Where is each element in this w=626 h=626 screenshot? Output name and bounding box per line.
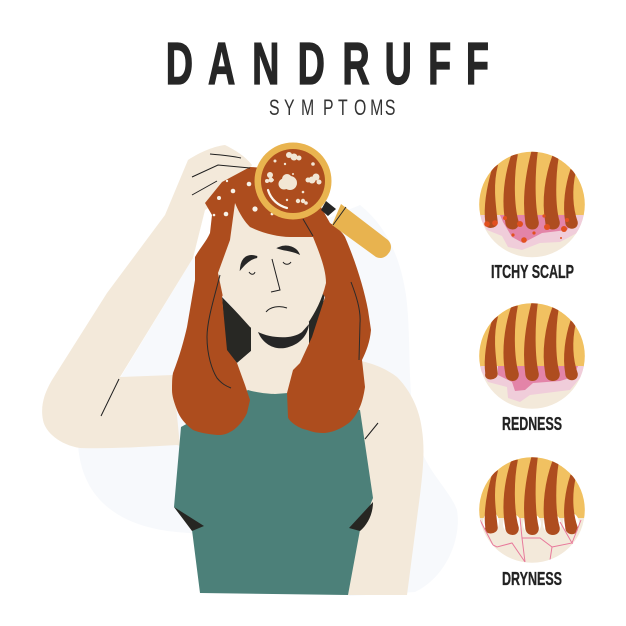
flakes on hair [213, 180, 273, 216]
panel: redness [478, 303, 586, 434]
right arm [340, 360, 423, 595]
neck [237, 322, 309, 400]
label: DRYNESS [502, 569, 562, 589]
subtitle: SYMPTOMS [269, 97, 395, 121]
flakes [265, 152, 322, 205]
handle [321, 201, 336, 216]
background blob [78, 205, 458, 596]
raised arm [42, 145, 252, 448]
title: DANDRUFF [166, 32, 489, 97]
hair lines [207, 219, 360, 388]
dryness circle [478, 457, 586, 564]
redness circle [478, 303, 586, 412]
scalp circle [478, 151, 586, 261]
finger lines [192, 154, 250, 195]
back shadow [222, 285, 326, 363]
magnifying glass [254, 142, 391, 258]
armpit shadows [174, 507, 204, 531]
face lines [249, 259, 291, 312]
lens [254, 142, 332, 220]
label: ITCHY SCALP [491, 262, 574, 282]
face [218, 203, 326, 338]
panel: itchy scalp [478, 151, 586, 282]
eyebrows [241, 247, 298, 268]
woman illustration [42, 145, 423, 595]
chin shadow [258, 324, 309, 348]
arm creases [101, 379, 378, 439]
hair [172, 167, 371, 435]
lens highlight [268, 190, 287, 208]
top [174, 390, 373, 595]
label: REDNESS [502, 414, 562, 434]
panel: dryness [478, 457, 586, 589]
